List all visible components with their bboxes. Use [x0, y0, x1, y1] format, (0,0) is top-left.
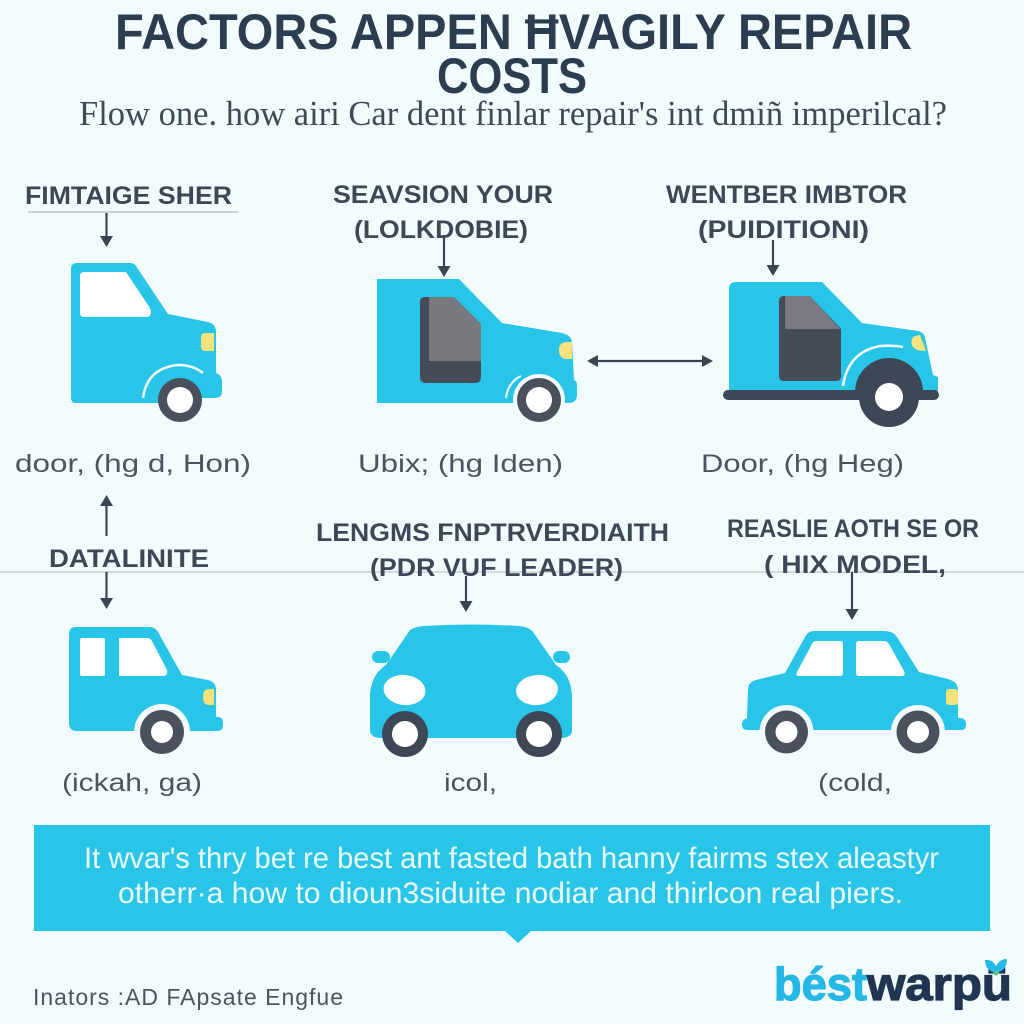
heading: factor 1: FIMTAIGE SHER [25, 182, 232, 210]
arrow: up [100, 495, 113, 536]
heading: factor 2 [333, 181, 553, 244]
caption: factor 2: Ubix; (hg Iden) [358, 450, 563, 478]
icon: van [69, 627, 223, 760]
caption: factor 1: door, (hg d, Hon) [15, 450, 251, 478]
arrow: down to sedan [846, 572, 858, 620]
logo: warpü [866, 958, 1012, 1010]
caption: factor 5: icol, [444, 769, 497, 797]
panel: factor 2 truck [333, 181, 577, 478]
heading: factor 3: (PUIDITIONI) [698, 216, 869, 244]
footer source note: Inators :AD FApsate Engfue [33, 984, 343, 1010]
logo: bést [774, 958, 867, 1010]
arrow: down to truck [766, 240, 780, 276]
subtitle: Flow one. how airi Car dent finlar repair's int dmiñ imperilcal? [79, 94, 947, 133]
caption: factor 4: (ickah, ga) [62, 769, 202, 797]
title: FACTORS APPEN ĦVAGILY REPAIR [115, 4, 912, 60]
arrow: down to van [100, 572, 113, 609]
heading: factor 3 [666, 181, 907, 244]
icon: truck 1 [71, 263, 222, 422]
heading: factor 3: WENTBER IMBTOR [666, 181, 907, 209]
icon: sedan [742, 631, 966, 760]
panel: factor 6 sedan [727, 515, 979, 797]
arrow: down to truck [438, 235, 450, 277]
panel: factor 1 truck [15, 182, 251, 478]
title: COSTS [437, 48, 587, 104]
heading: factor 6: REASLIE AOTH SE OR [727, 515, 979, 543]
heading: factor 2: SEAVSION YOUR [333, 181, 553, 209]
icon: front car [370, 624, 572, 757]
icon: truck 3 [723, 282, 939, 427]
heading: factor 4: DATALINITE [49, 545, 209, 573]
arrow: down to car [460, 576, 472, 612]
callout banner [34, 825, 990, 943]
title [115, 4, 912, 104]
callout text: It wvar's thry bet re best ant fasted bath hanny fairms stex aleastyr [84, 842, 939, 875]
callout text [84, 842, 939, 910]
heading: factor 6 [727, 515, 979, 579]
arrow: double between trucks [587, 355, 713, 367]
panel: factor 4 van [49, 495, 223, 797]
panel: factor 5 front car [316, 519, 669, 797]
heading: factor 5: LENGMS FNPTRVERDIAITH [316, 519, 669, 547]
heading: factor 5: (PDR VUF LEADER) [370, 554, 623, 582]
logo [774, 958, 1012, 1010]
caption: factor 3: Door, (hg Heg) [701, 450, 904, 478]
heading: factor 6: ( HIX MODEL, [764, 551, 946, 579]
icon: truck 2 [377, 279, 577, 426]
heading: factor 2: (LOLKDOBIE) [354, 216, 528, 244]
panel: factor 3 truck [666, 181, 939, 478]
arrow: down to truck [100, 213, 113, 247]
heading underline [28, 211, 238, 213]
heading: factor 5 [316, 519, 669, 582]
caption: factor 6: (cold, [818, 769, 892, 797]
callout text: otherr·a how to dioun3siduite nodiar and thirlcon real piers. [118, 877, 903, 910]
